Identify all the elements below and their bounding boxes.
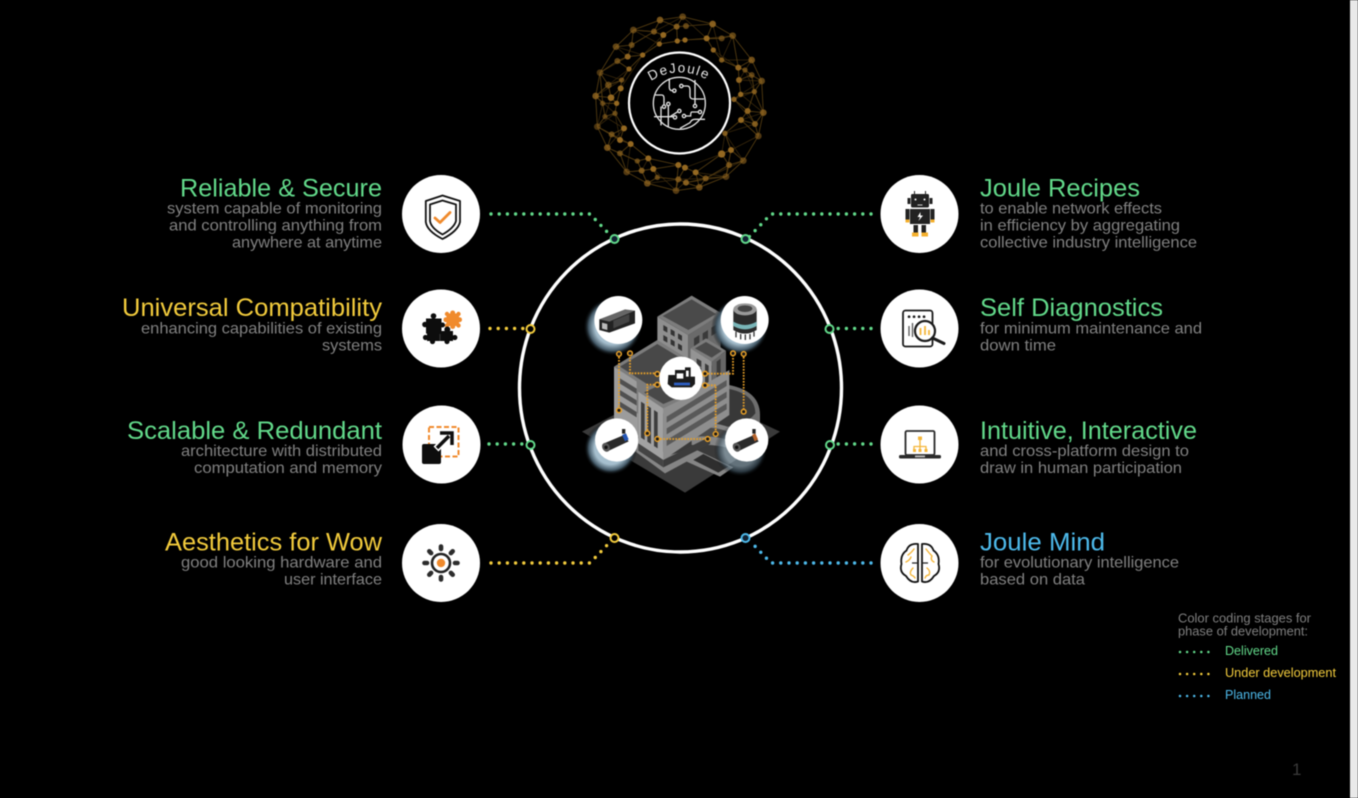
device: air handling unit xyxy=(594,296,642,344)
text: Universal Compatibility xyxy=(122,294,383,354)
icon: robot xyxy=(880,175,958,253)
icon: sun design xyxy=(402,524,480,602)
page number: 1 xyxy=(1292,760,1301,779)
text: Universal Compatibility: systems xyxy=(322,338,382,354)
text: Scalable & Redundant: architecture with distributed xyxy=(181,443,382,460)
text: Reliable & Secure xyxy=(167,174,382,252)
text: Scalable & Redundant: computation and memory xyxy=(194,460,382,477)
connector: Scalable & Redundant xyxy=(489,441,534,449)
connector: Universal Compatibility xyxy=(490,325,534,333)
legend: phase of development: xyxy=(1178,624,1308,638)
text: Intuitive, Interactive: draw in human participation xyxy=(980,460,1182,477)
legend: Planned xyxy=(1225,688,1271,702)
text: Joule Recipes: in efficiency by aggregating xyxy=(980,218,1180,234)
network mesh xyxy=(592,13,767,194)
text: Joule Recipes xyxy=(980,174,1197,252)
legend: Color coding stages for xyxy=(1178,612,1311,626)
icon: brain xyxy=(880,524,958,602)
text: Reliable & Secure: anywhere at anytime xyxy=(232,234,382,252)
text: Self Diagnostics: for minimum maintenance and xyxy=(980,320,1202,338)
text: Reliable & Secure: Reliable & Secure xyxy=(180,174,382,202)
legend xyxy=(1178,612,1337,702)
device: cooling tower xyxy=(721,296,769,344)
orange wiring xyxy=(617,351,746,441)
rotunda xyxy=(692,383,760,452)
text: Aesthetics for Wow xyxy=(165,528,383,588)
logo disc xyxy=(629,52,730,154)
icon: scale up xyxy=(402,406,480,484)
text: Universal Compatibility: enhancing capabilities of existing xyxy=(141,320,382,338)
text: Intuitive, Interactive: Intuitive, Interactive xyxy=(980,417,1197,445)
icon: puzzle pieces xyxy=(402,290,480,368)
icon: diagnostics magnifier xyxy=(880,290,958,368)
device halos xyxy=(583,297,769,477)
text: Intuitive, Interactive: and cross-platform design to xyxy=(980,443,1189,460)
legend: Under development xyxy=(1225,666,1337,680)
connector: Joule Mind xyxy=(742,534,871,563)
main ring xyxy=(520,224,842,552)
logo: DeJoule network emblem xyxy=(592,12,768,194)
front block xyxy=(638,370,729,467)
text: Aesthetics for Wow: good looking hardware and xyxy=(181,554,382,572)
small tower xyxy=(691,338,726,407)
text: Reliable & Secure: system capable of monitoring xyxy=(167,200,382,218)
device: motor left xyxy=(595,418,638,462)
text: Universal Compatibility: Universal Compatibility xyxy=(122,294,383,322)
ground plane xyxy=(582,407,780,493)
text: Joule Mind xyxy=(980,528,1179,588)
text: Joule Recipes: to enable network effects xyxy=(980,200,1162,218)
connector: Joule Recipes xyxy=(742,214,871,243)
text: Aesthetics for Wow: user interface xyxy=(284,572,382,588)
text: Joule Recipes: Joule Recipes xyxy=(980,174,1140,202)
logo wordmark: DeJoule xyxy=(646,62,709,81)
legend: Delivered xyxy=(1225,644,1278,658)
back tower xyxy=(657,296,722,387)
icon: laptop xyxy=(880,406,958,484)
text: Aesthetics for Wow: Aesthetics for Wow xyxy=(165,528,383,556)
text: Self Diagnostics xyxy=(980,294,1202,354)
text: Self Diagnostics: Self Diagnostics xyxy=(980,294,1163,322)
text: Scalable & Redundant xyxy=(127,417,382,477)
connector: Reliable & Secure xyxy=(491,214,618,243)
connector: Intuitive, Interactive xyxy=(826,441,871,449)
text: Joule Mind: for evolutionary intelligence xyxy=(980,554,1179,572)
main block xyxy=(614,340,702,437)
icon: shield xyxy=(402,175,480,253)
device: central controller xyxy=(659,357,703,400)
text: Intuitive, Interactive xyxy=(980,417,1197,477)
text: Self Diagnostics: down time xyxy=(980,338,1056,354)
device: motor right xyxy=(725,418,768,462)
text: Joule Recipes: collective industry intelligence xyxy=(980,234,1197,252)
text: Joule Mind: Joule Mind xyxy=(980,528,1105,556)
central building illustration xyxy=(582,296,780,493)
logo circuit icon xyxy=(653,77,705,129)
connector: Aesthetics for Wow xyxy=(491,534,618,563)
text: Scalable & Redundant: Scalable & Redundant xyxy=(127,417,382,445)
connector: Self Diagnostics xyxy=(826,325,871,333)
text: Reliable & Secure: and controlling anything from xyxy=(169,218,382,234)
text: Joule Mind: based on data xyxy=(980,572,1085,588)
